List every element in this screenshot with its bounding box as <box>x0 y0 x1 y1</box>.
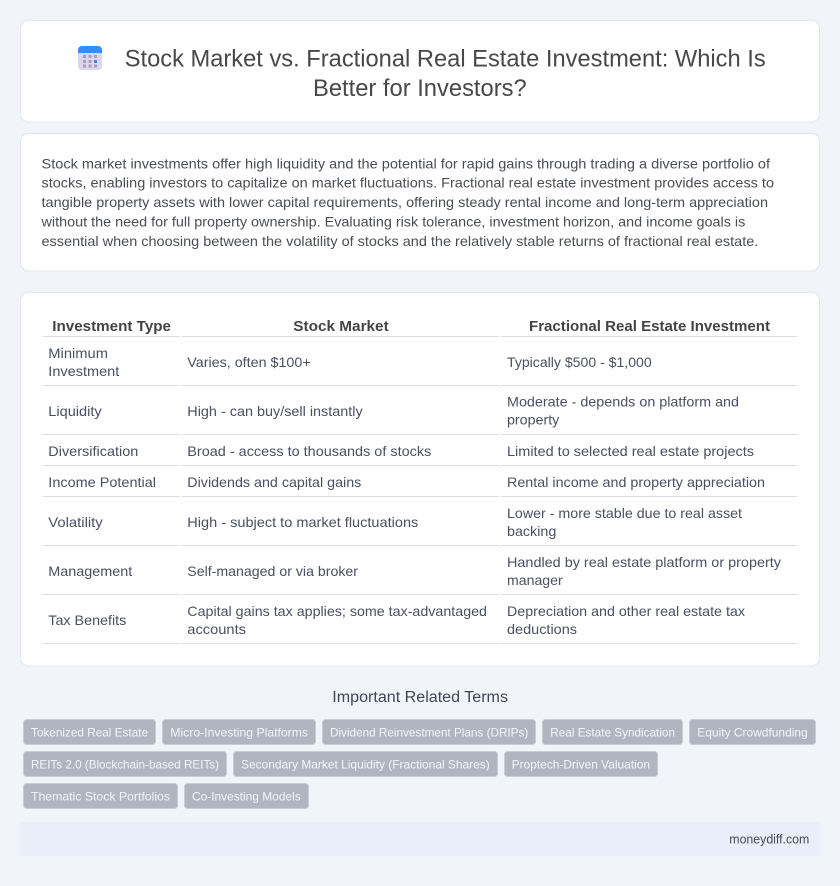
row: minimum investment <box>48 345 652 379</box>
row: income potential <box>48 474 765 490</box>
row: volatility <box>48 505 742 539</box>
tag: REITs 2.0: REITs 2.0 (Blockchain-based REITs) <box>31 758 219 772</box>
text block: summary: essential when choosing between the volatility of stocks and the relatively stable returns of fractional real estate. <box>42 233 758 249</box>
table header row <box>52 319 770 335</box>
text block: summary: tangible property assets with lower capital requirements, offering steady rental income and long-term appreciation <box>42 194 768 210</box>
row: volatility: High - subject to market fluctuations <box>187 514 418 530</box>
tag: Tokenized Real Estate: Tokenized Real Estate <box>31 726 148 740</box>
tag: Micro-Investing Platforms: Micro-Investing Platforms <box>170 726 308 740</box>
row: management <box>48 554 781 588</box>
panel: summary paragraph <box>20 134 820 271</box>
text block: summary: Stock market investments offer high liquidity and the potential for rapid gains through trading a diverse portfolio of <box>42 155 770 171</box>
row: tax benefits: Tax Benefits <box>48 612 126 628</box>
row: volatility: Volatility <box>48 514 103 530</box>
row: diversification: Limited to selected real estate projects <box>507 443 754 459</box>
tag: Co-Investing Models: Co-Investing Models <box>192 790 301 804</box>
tag: Co-Investing Models <box>184 784 308 808</box>
row: minimum investment: Typically $500 - $1,000 <box>507 354 652 370</box>
heading: important related terms: Important Related Terms <box>332 689 508 706</box>
row: tax benefits: Capital gains tax applies; some tax-advantaged <box>187 603 487 619</box>
tag: Real Estate Syndication: Real Estate Syndication <box>550 726 675 740</box>
row: income potential: Dividends and capital gains <box>187 474 361 490</box>
text block: summary: without the need for full property ownership. Evaluating risk tolerance, investment horizon, and income goals is <box>40 214 745 230</box>
title: Better for Investors? <box>313 75 527 102</box>
panel: related term tags <box>24 720 816 808</box>
table header row: Investment Type <box>52 319 171 335</box>
tag: DRIPs <box>322 720 536 744</box>
tag: Thematic Stock Portfolios <box>24 784 178 808</box>
row: liquidity: Moderate - depends on platform and <box>507 394 739 410</box>
row: diversification <box>48 443 754 459</box>
row: liquidity <box>48 394 739 428</box>
row: liquidity: High - can buy/sell instantly <box>187 403 363 419</box>
table header row: Fractional Real Estate Investment <box>529 319 770 335</box>
tag: Secondary Market Liquidity: Secondary Market Liquidity (Fractional Shares) <box>241 758 490 772</box>
tag: Proptech-Driven Valuation <box>504 752 658 776</box>
tag: Micro-Investing Platforms <box>162 720 316 744</box>
text block: summary: stocks, enabling investors to capitalize on market fluctuations. Fractional real estate investment provides access to <box>42 174 774 190</box>
tag: Thematic Stock Portfolios: Thematic Stock Portfolios <box>31 790 170 804</box>
title: Stock Market vs. Fractional Real Estate Investment: Which Is <box>125 46 766 73</box>
row: diversification: Diversification <box>48 443 138 459</box>
text block: summary <box>40 155 774 249</box>
title <box>125 46 766 102</box>
tag: REITs 2.0 <box>24 752 226 776</box>
row: minimum investment: Investment <box>48 363 119 379</box>
row: tax benefits: deductions <box>507 621 577 637</box>
row: liquidity: property <box>507 412 559 428</box>
row: management: manager <box>507 572 563 588</box>
footer: moneydiff.com <box>729 832 809 846</box>
row: volatility: Lower - more stable due to real asset <box>507 505 742 521</box>
row: income potential: Rental income and property appreciation <box>507 474 765 490</box>
row: tax benefits: accounts <box>187 621 246 637</box>
row: management: Management <box>48 563 132 579</box>
row: management: Self-managed or via broker <box>187 563 358 579</box>
row: liquidity: Liquidity <box>48 403 102 419</box>
row: minimum investment: Minimum <box>48 345 108 361</box>
tag: Tokenized Real Estate <box>24 720 156 744</box>
tag: Equity Crowdfunding <box>690 720 816 744</box>
row: diversification: Broad - access to thousands of stocks <box>187 443 431 459</box>
row: income potential: Income Potential <box>48 474 156 490</box>
footer <box>20 822 820 856</box>
tag: Proptech-Driven Valuation: Proptech-Driven Valuation <box>512 758 650 772</box>
row: minimum investment: Varies, often $100+ <box>187 354 311 370</box>
tag: Secondary Market Liquidity <box>234 752 498 776</box>
tag: Equity Crowdfunding: Equity Crowdfunding <box>697 726 808 740</box>
tag: DRIPs: Dividend Reinvestment Plans (DRIPs) <box>330 726 528 740</box>
panel: title header <box>20 20 820 122</box>
row: tax benefits: Depreciation and other real estate tax <box>507 603 745 619</box>
row: volatility: backing <box>507 523 556 539</box>
panel: comparison table <box>20 292 820 666</box>
icon: calendar <box>78 46 102 70</box>
tag: Real Estate Syndication <box>542 720 682 744</box>
table header row: Stock Market <box>293 319 389 335</box>
row: management: Handled by real estate platform or property <box>507 554 781 570</box>
row: tax benefits <box>48 603 745 637</box>
